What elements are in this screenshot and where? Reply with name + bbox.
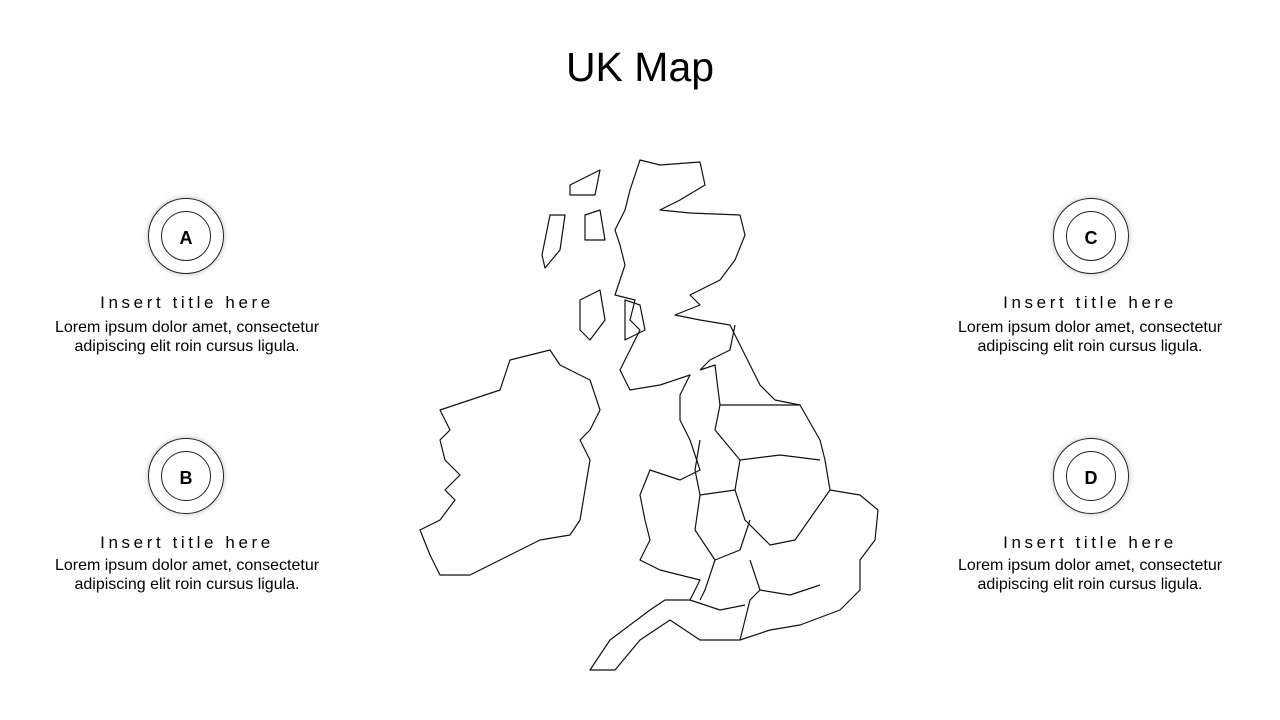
icon: circle B [148, 438, 224, 514]
regions [690, 325, 830, 640]
item A [55, 195, 319, 355]
text A: adipiscing elit roin cursus ligula. [74, 338, 300, 355]
text D: Lorem ipsum dolor amet, consectetur [958, 557, 1222, 574]
text C: adipiscing elit roin cursus ligula. [978, 338, 1202, 355]
heading C: Insert title here [1003, 293, 1177, 312]
text C: Lorem ipsum dolor amet, consectetur [958, 319, 1222, 336]
heading B: Insert title here [100, 533, 274, 552]
title: UK Map [566, 44, 714, 90]
great britain [590, 160, 878, 670]
heading D: Insert title here [1003, 533, 1177, 552]
text B: Lorem ipsum dolor amet, consectetur [55, 557, 319, 574]
icon: circle A: A [180, 228, 192, 248]
text B [55, 557, 319, 593]
icon: circle C [1053, 198, 1129, 274]
icon: circle A [148, 198, 224, 274]
heading A: Insert title here [100, 293, 274, 312]
icon: circle C: C [1084, 228, 1098, 248]
ireland [420, 350, 600, 575]
text D: adipiscing elit roin cursus ligula. [978, 576, 1202, 593]
item B [55, 435, 319, 593]
item D [958, 435, 1222, 593]
text A [55, 319, 319, 355]
islands [542, 170, 645, 340]
icon: circle D [1053, 438, 1129, 514]
text B: adipiscing elit roin cursus ligula. [74, 576, 300, 593]
text A: Lorem ipsum dolor amet, consectetur [55, 319, 319, 336]
icon: circle B: B [180, 468, 192, 488]
item C [958, 195, 1222, 355]
text C [958, 319, 1222, 355]
icon: circle D: D [1084, 468, 1098, 488]
text D [958, 557, 1222, 593]
